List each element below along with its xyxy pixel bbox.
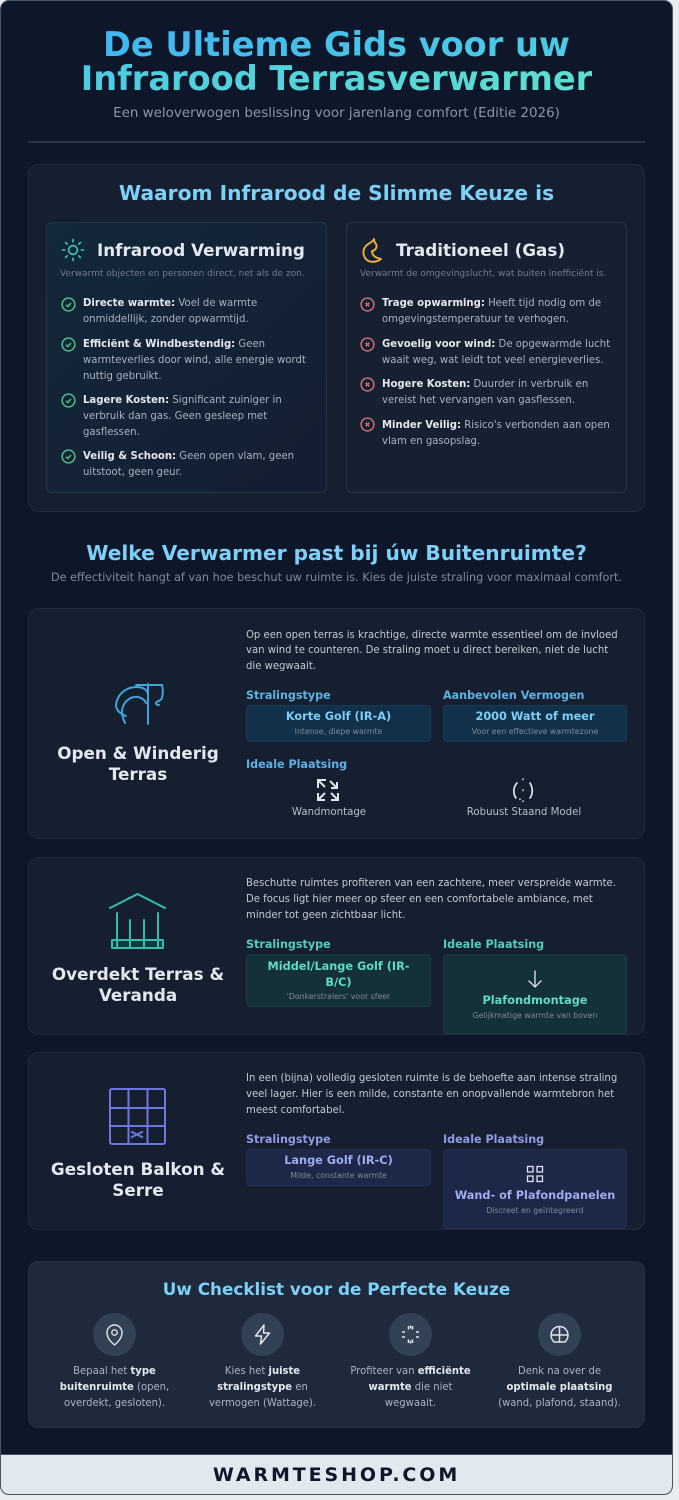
list item: efficient: Efficiënt & Windbestendig: Geen [83,338,265,350]
box: plafondmontage [443,954,627,1034]
list item: efficient [61,337,306,382]
checklist item: type: overdekt, gesloten). [64,1397,165,1409]
checklist item: efficiente warmte: Profiteer van efficiënte [350,1365,471,1377]
list item: lagere kosten: Lagere Kosten: Significant zuiniger in [83,394,282,406]
list item: directe warmte [61,297,257,325]
list item: veilig en schoon: uitstoot, geen geur. [83,466,182,478]
label: stralingstype: Stralingstype [246,938,331,950]
list item: lagere kosten: verbruik dan gas. Geen gesleep met [83,410,267,422]
heading: checklist: Uw Checklist voor de Perfecte Keuze [163,1279,510,1299]
text: gesloten description: In een (bijna) volledig gesloten ruimte is de behoefte aan intense straling [246,1072,617,1084]
heading: open en winderig: Open & Winderig [57,743,219,763]
card: infrarood verwarming [46,222,327,493]
list item: minder veilig [360,417,610,447]
footer [1,1454,672,1494]
checklist item: efficiente warmte: wegwaait. [385,1397,436,1409]
text: traditioneel intro: Verwarmt de omgevingslucht, wat buiten inefficiënt is. [360,269,606,279]
box: middel lange golf: 'Donkerstralers' voor sfeer [287,992,390,1001]
list item: trage opwarming: Trage opwarming: Heeft tijd nodig om de [382,297,601,309]
text: overdekt description [246,877,616,921]
panel: overdekt terras [28,857,645,1035]
icon: check [61,449,76,464]
heading: infrarood verwarming: Infrarood Verwarming [97,240,305,260]
icon: check [61,297,76,312]
box: wand- of plafondpanelen: Discreet en geïntegreerd [486,1206,584,1215]
box: middel lange golf: B/C) [325,976,352,989]
label: ideale plaatsing: Ideale Plaatsing [443,1132,544,1146]
icon: check [61,393,76,408]
icon: panels [526,1166,544,1182]
checklist item: plaatsing: optimale plaatsing [507,1381,612,1393]
list item: gevoelig voor wind: waait weg, wat leidt tot veel energieverlies. [382,354,603,366]
checklist item: type [60,1313,169,1409]
text: wandmontage: Wandmontage [292,807,366,818]
heading: overdekt terras: Veranda [99,984,177,1004]
label: ideale plaatsing: Ideale Plaatsing [443,938,544,950]
title: Infrarood Terrasverwarmer [81,59,592,98]
text: gesloten description: veel lager. Hier is een milde, constante en onopvallende warmtebron het [246,1088,614,1100]
icon: cross [360,337,375,352]
list item: trage opwarming [360,297,601,325]
list item: hogere kosten [360,377,588,406]
footer brand: WARMTESHOP.COM [213,1464,460,1486]
text: staand model: Robuust Staand Model [467,807,581,818]
panel: checklist [28,1261,645,1428]
box: plafondmontage: Gelijkmatige warmte van boven [473,1011,597,1020]
box: lange golf: Milde, constante warmte [290,1171,387,1180]
icon: wandmontage arrows [317,779,339,801]
title: De Ultieme Gids voor uw [103,25,570,64]
heading: gesloten balkon: Gesloten Balkon & [51,1159,225,1179]
heading: overdekt terras: Overdekt Terras & [52,964,224,984]
list item: hogere kosten: vereist het vervangen van gasflessen. [382,394,575,406]
panel: open en winderig terras [28,608,645,839]
text: section intro: De effectiviteit hangt af van hoe beschut uw ruimte is. Kies de juiste straling voor maximaal comfort. [51,571,622,584]
text: overdekt description: minder tot geen zichtbaar licht. [246,909,405,921]
box: wand- of plafondpanelen: Wand- of Plafondpanelen [455,1189,615,1202]
heading: open en winderig: Terras [109,764,167,784]
text: infrarood intro: Verwarmt objecten en personen direct, net als de zon. [60,269,305,279]
box: korte golf: Intense, diepe warmte [295,727,382,736]
heading: open en winderig [57,743,219,784]
checklist item: stralingstype: vermogen (Wattage). [209,1397,316,1409]
icon: placement [538,1313,581,1356]
label: aanbevolen vermogen: Aanbevolen Vermogen [443,688,584,702]
icon: veranda [109,893,166,949]
heading: overdekt terras [52,964,224,1004]
box: middel lange golf [246,954,431,1007]
box: lange golf: Lange Golf (IR-C) [284,1154,393,1167]
heading: traditioneel: Traditioneel (Gas) [396,240,565,260]
heading: gesloten balkon [51,1159,225,1200]
box: plafondmontage: Plafondmontage [483,994,587,1007]
icon: window grid [109,1088,166,1145]
icon: cross [360,297,375,312]
box: vermogen: 2000 Watt of meer [475,710,595,723]
list item: gevoelig voor wind [360,337,610,366]
icon: cross [360,377,375,392]
icon: flame [362,238,382,263]
checklist item: efficiente warmte: warmte die niet [369,1381,452,1393]
checklist item: plaatsing [498,1313,621,1409]
label: ideale plaatsing: Ideale Plaatsing [246,758,347,771]
box: wand- of plafondpanelen [443,1149,627,1229]
list item: minder veilig: Minder Veilig: Risico's verbonden aan open [382,419,610,431]
icon: check [61,337,76,352]
label: stralingstype: Stralingstype [246,688,331,702]
list item: lagere kosten [61,393,282,438]
icon: staand model [513,778,534,802]
box: vermogen [443,705,627,742]
icon: cross [360,417,375,432]
list item: directe warmte: Directe warmte: Voel de warmte [83,297,257,309]
checklist item: stralingstype [209,1313,316,1409]
checklist item: type: buitenruimte (open, [60,1381,169,1393]
heading: welke verwarmer: Welke Verwarmer past bij úw Buitenruimte? [86,541,587,565]
text: open description [246,628,618,672]
icon: dotted ring [389,1313,432,1356]
list item: directe warmte: onmiddellijk, zonder opwarmtijd. [83,313,249,325]
icon: wind terrace [115,683,164,725]
checklist item: plaatsing: Denk na over de [518,1365,601,1377]
panel: waarom infrarood [28,164,645,512]
text: overdekt description: Beschutte ruimtes profiteren van een zachtere, meer verspreide warmte. [246,877,616,889]
box: lange golf [246,1149,431,1186]
label: stralingstype: Stralingstype [246,1132,331,1146]
heading: gesloten balkon: Serre [112,1180,164,1200]
box: korte golf [246,705,431,742]
list item: minder veilig: vlam en gasopslag. [382,435,480,447]
list item: trage opwarming: omgevingstemperatuur te verhogen. [382,313,569,325]
text: open description: Op een open terras is krachtige, directe warmte essentieel om de invloed [246,628,618,640]
card: traditioneel gas [346,222,627,493]
list item: efficient: nuttig gebruikt. [83,370,162,382]
checklist item: efficiente warmte [350,1313,471,1409]
checklist item: plaatsing: (wand, plafond, staand). [498,1397,621,1409]
checklist item: stralingstype: stralingstype en [217,1381,308,1393]
icon: arrow down [528,970,542,988]
text: overdekt description: De focus ligt hier meer op sfeer en een comfortabele ambiance, met [246,893,593,905]
box: vermogen: Voor een effectieve warmtezone [472,727,598,736]
list item: veilig en schoon: Veilig & Schoon: Geen open vlam, geen [83,450,294,462]
title [81,25,592,98]
text: gesloten description [246,1072,617,1116]
text: open description: die wegwaait. [246,660,316,672]
subtitle: Een weloverwogen beslissing voor jarenlang comfort (Editie 2026) [113,106,560,121]
list item: veilig en schoon [61,449,294,478]
checklist item: stralingstype: Kies het juiste [225,1365,300,1377]
text: gesloten description: meest comfortabel. [246,1104,345,1116]
icon: location pin [93,1313,136,1356]
icon: sun [62,238,84,262]
text: open description: van wind te counteren. De straling moet u direct bereiken, niet de lucht [246,644,608,656]
list item: hogere kosten: Hogere Kosten: Duurder in verbruik en [382,378,588,390]
list item: efficient: warmteverlies door wind, alle energie wordt [83,354,306,366]
box: middel lange golf: Middel/Lange Golf (IR- [268,960,410,973]
heading: waarom infrarood: Waarom Infrarood de Slimme Keuze is [119,181,554,205]
list item: gevoelig voor wind: Gevoelig voor wind: De opgewarmde lucht [382,338,610,350]
list item: lagere kosten: gasflessen. [83,426,140,438]
panel: gesloten balkon [28,1052,645,1230]
icon: bolt [241,1313,284,1356]
box: korte golf: Korte Golf (IR-A) [286,710,391,723]
checklist item: type: Bepaal het type [73,1365,156,1377]
